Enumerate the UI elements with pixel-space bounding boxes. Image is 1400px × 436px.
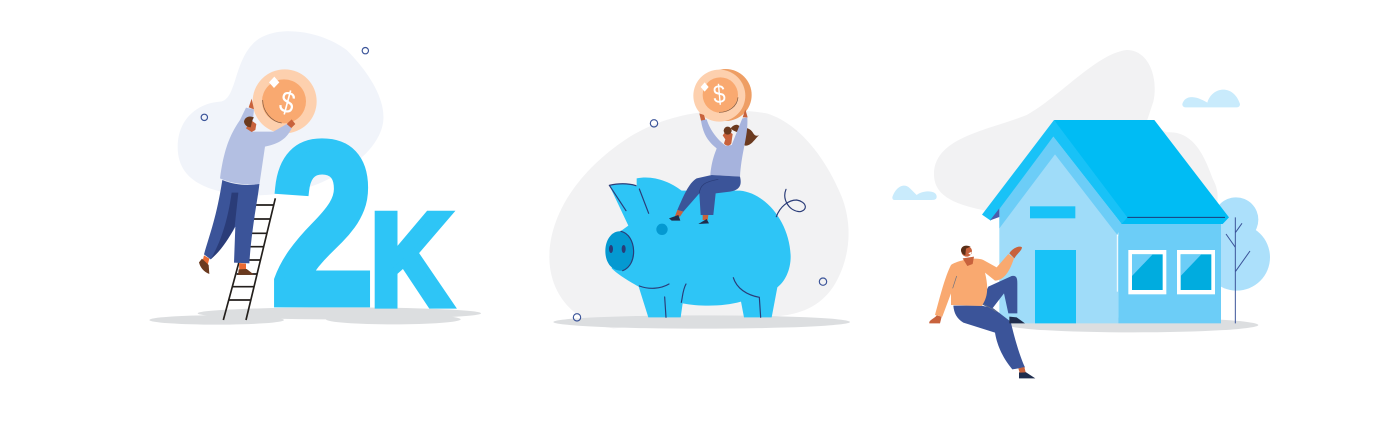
decorative circle (819, 278, 827, 285)
decorative circle (362, 47, 368, 54)
cloud (892, 186, 937, 200)
tree foliage (1203, 197, 1270, 291)
decorative circle (201, 114, 207, 120)
woman riding pig (669, 109, 759, 224)
coin (253, 69, 317, 133)
coin: $ (276, 84, 299, 122)
man climbing ladder (199, 99, 295, 275)
piggy bank (605, 177, 805, 317)
cloud (1182, 90, 1240, 107)
coin held overhead: $ (712, 80, 727, 110)
ground shadow (1008, 318, 1258, 332)
ground shadow (553, 315, 850, 329)
tree trunk and branches (1226, 217, 1250, 323)
background blob (178, 31, 383, 195)
seated man (929, 246, 1035, 378)
house (982, 120, 1229, 323)
ground shadows (149, 307, 481, 325)
panel: 2k ladder scene (149, 31, 481, 350)
big number 2: 2 (272, 98, 373, 350)
panel: piggy bank scene (549, 69, 850, 329)
decorative circle (573, 314, 581, 321)
background blob (934, 50, 1218, 213)
big letter k: K (371, 186, 451, 333)
panel: house scene (892, 50, 1270, 378)
background blob (549, 110, 849, 328)
ladder (223, 197, 275, 320)
coin held overhead (693, 69, 752, 122)
decorative circle (650, 120, 658, 127)
